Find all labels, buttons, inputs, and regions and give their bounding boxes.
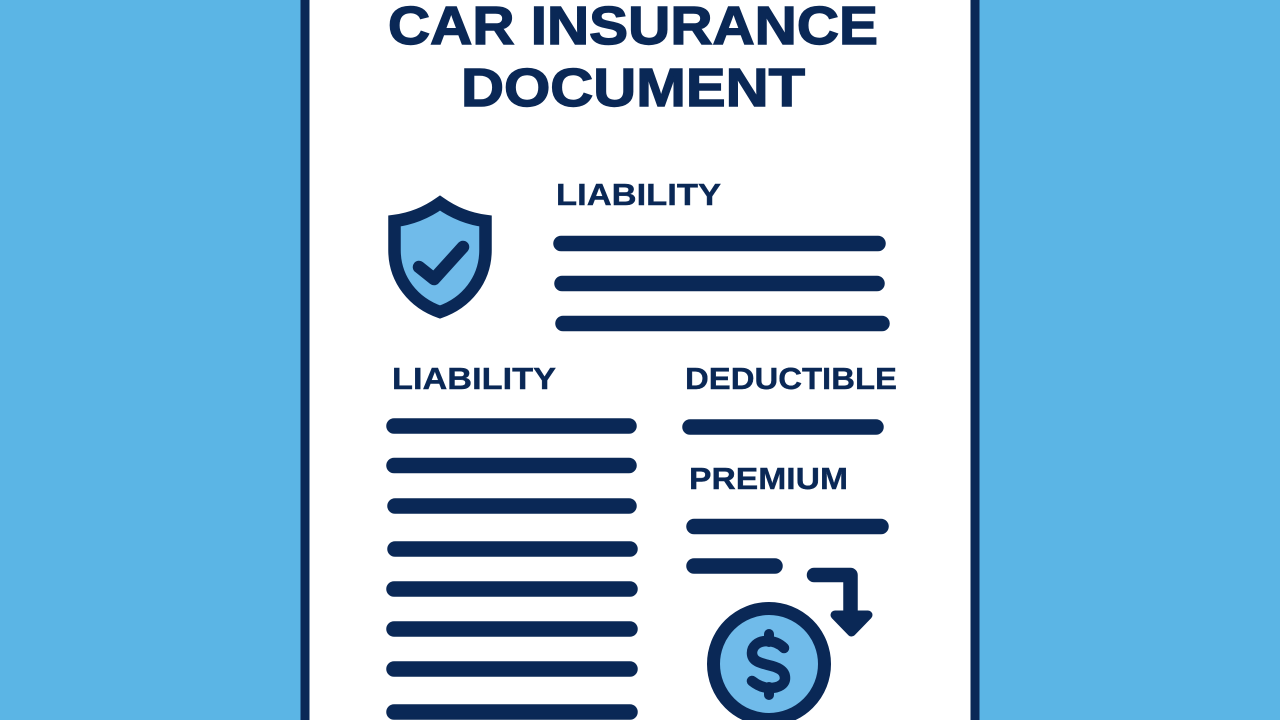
icon: shield with check mark <box>394 203 486 312</box>
heading: deductible: DEDUCTIBLE <box>685 361 897 396</box>
text lines: liability top <box>561 244 882 324</box>
panel: document page <box>305 0 975 720</box>
heading: premium: PREMIUM <box>689 461 848 496</box>
title <box>388 0 878 118</box>
heading: liability top: LIABILITY <box>556 177 721 212</box>
text lines: liability left <box>394 426 630 712</box>
arrow: down to coin <box>814 575 868 632</box>
icon: dollar coin <box>714 608 824 720</box>
text line: deductible <box>690 419 876 435</box>
title: DOCUMENT <box>461 58 805 118</box>
heading: liability left: LIABILITY <box>392 361 556 396</box>
text lines: premium <box>694 526 881 566</box>
